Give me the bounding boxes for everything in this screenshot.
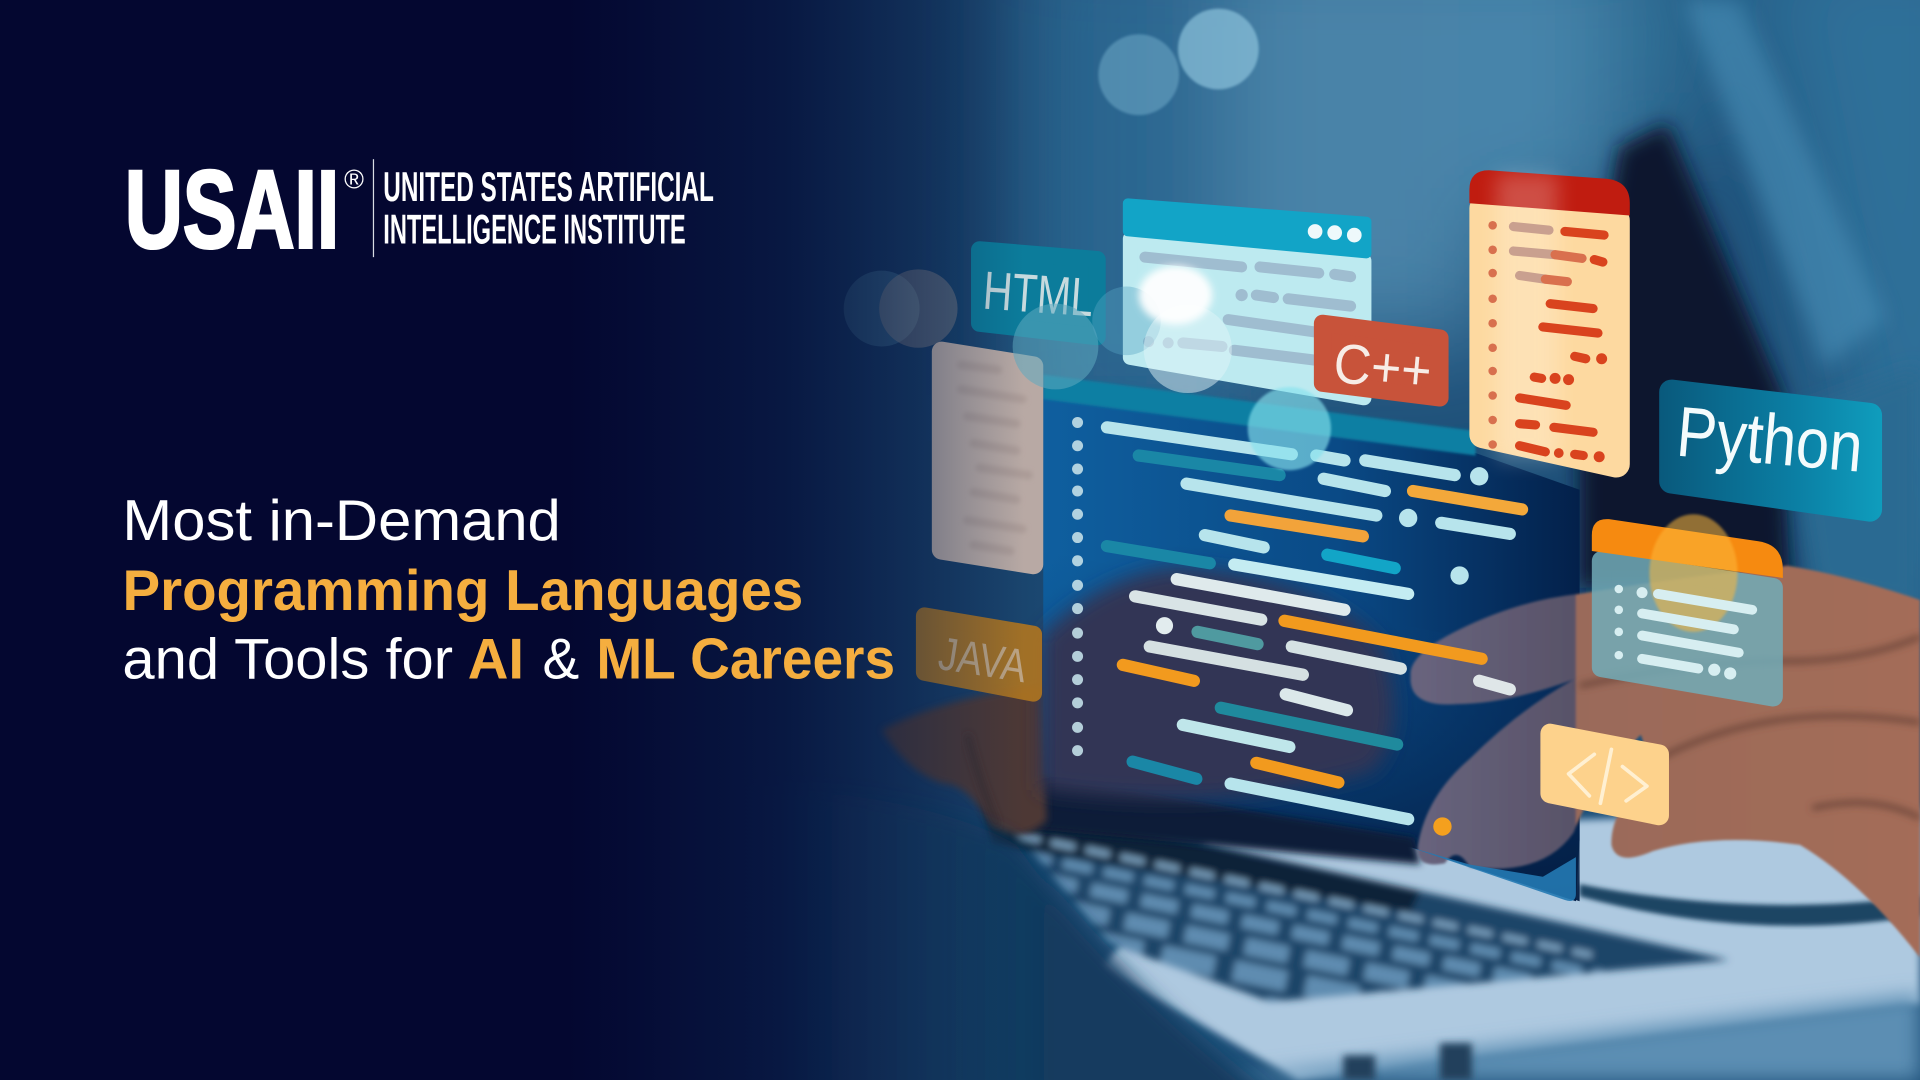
window code lines (1145, 257, 1351, 360)
curtain highlight (1684, 0, 1886, 367)
dark torso band (1580, 122, 1790, 588)
palm over screen (1041, 568, 1393, 799)
registered mark: ® (344, 165, 364, 195)
card highlight (1496, 174, 1558, 462)
title: ML Careers (596, 627, 895, 691)
code icon card (1550, 733, 1659, 816)
finger creases (1580, 637, 1920, 818)
JAVA badge: JAVA (935, 627, 1030, 692)
title: and Tools for (122, 627, 453, 691)
laptop (980, 784, 1920, 1080)
title: Programming Languages (122, 559, 803, 623)
card line dots (1488, 221, 1497, 449)
orange code card (1469, 170, 1630, 464)
blue code window (1128, 203, 1367, 398)
orange tool window (1592, 514, 1783, 697)
Python badge: Python (1674, 393, 1866, 488)
screen top bar (1043, 375, 1476, 456)
bokeh lights (844, 9, 1259, 348)
title: Most in-Demand (122, 489, 561, 553)
window dots (1308, 224, 1362, 242)
laptop lower shade (1212, 994, 1920, 1080)
left dark fade (0, 0, 1347, 1080)
panel: main code screen (1016, 375, 1580, 901)
screen line numbers (1072, 417, 1083, 756)
window bubble (1649, 514, 1738, 632)
title: AI (468, 627, 524, 691)
blurred laptop front (735, 784, 1273, 1080)
logo (125, 148, 714, 271)
left hand (882, 568, 1393, 834)
JAVA badge (924, 616, 1033, 693)
card code lines (1513, 227, 1604, 456)
trackpad slots (1343, 1043, 1472, 1080)
institute name: UNITED STATES ARTIFICIAL (383, 163, 714, 210)
HTML badge (980, 250, 1097, 337)
screen code dots (1156, 467, 1488, 836)
finger crease (967, 735, 998, 827)
screen lower shadow (1016, 774, 1420, 864)
wrist and fingers (882, 686, 1047, 834)
screen code lines (1107, 427, 1522, 819)
faded grey code card (942, 351, 1033, 564)
HTML badge: HTML (981, 261, 1095, 328)
logo wordmark: USAII (125, 148, 339, 271)
hinge shadow (1580, 884, 1920, 926)
laptop base (1102, 808, 1920, 1080)
title (122, 489, 895, 691)
title: & (542, 627, 579, 691)
keyboard (982, 812, 1729, 1006)
white bokeh over window (1013, 266, 1331, 470)
trackpad glow panel (1411, 847, 1576, 901)
C++ badge: C++ (1331, 331, 1434, 403)
logo divider (373, 159, 374, 257)
logo: INTELLIGENCE INSTITUTE (383, 206, 686, 253)
right hand (1410, 566, 1920, 958)
